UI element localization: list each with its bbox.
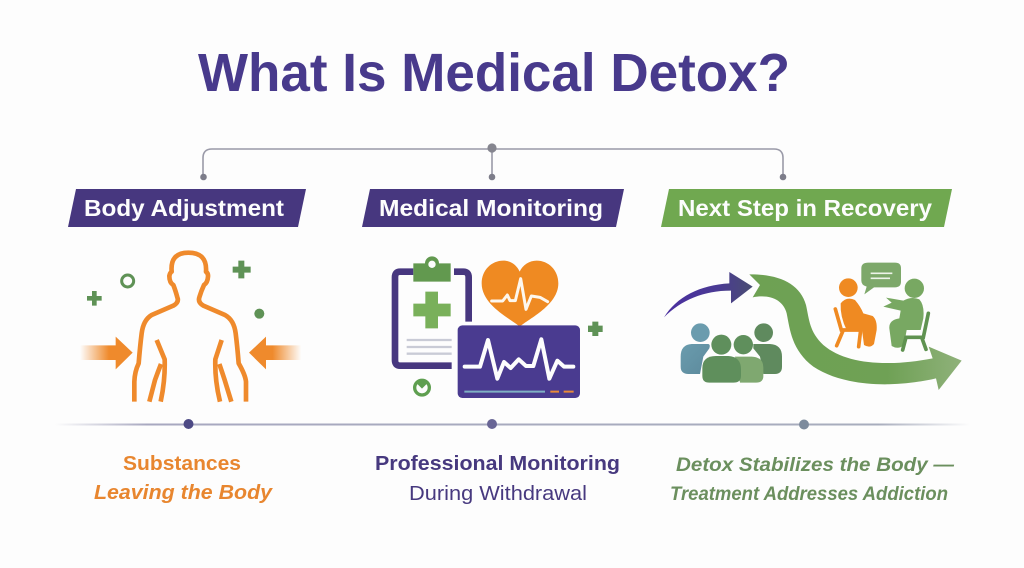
- caption: professional monitoring: During Withdrawal: [409, 483, 587, 505]
- caption: substances: Leaving the Body: [94, 482, 273, 504]
- caption: professional monitoring: Professional Monitoring: [375, 453, 620, 475]
- heading: next step in recovery: [661, 189, 952, 227]
- monitor: [458, 325, 580, 398]
- body outline: [134, 253, 246, 402]
- icon: recovery path with group and counseling: [664, 263, 962, 390]
- group of people: [681, 323, 782, 383]
- caption: professional monitoring: [375, 453, 620, 505]
- left arrow: [80, 337, 133, 369]
- heart: [482, 261, 558, 327]
- heading: next step in recovery: Next Step in Recovery: [678, 195, 932, 221]
- timeline axis: [55, 419, 970, 430]
- icon: clipboard, heart and monitor: [395, 256, 603, 398]
- heading: body adjustment: Body Adjustment: [84, 195, 284, 221]
- caption: substances: Substances: [123, 453, 241, 475]
- icon: body with arrows: [80, 253, 301, 402]
- caption: substances: [94, 453, 273, 504]
- purple arrow: [664, 272, 753, 317]
- decorative symbols: [87, 261, 264, 319]
- speech bubble: [861, 263, 901, 294]
- caption: detox stabilizes: Detox Stabilizes the Body —: [676, 455, 955, 476]
- clipboard: [395, 256, 469, 366]
- heading: body adjustment: [68, 189, 306, 227]
- small check circle: [415, 380, 429, 395]
- heading: medical monitoring: [362, 189, 624, 227]
- caption: detox stabilizes: Treatment Addresses Addiction: [670, 484, 948, 505]
- caption: detox stabilizes: [670, 455, 955, 505]
- green path arrow: [749, 274, 962, 390]
- connector tree: [200, 143, 786, 180]
- title: What Is Medical Detox?: [198, 43, 790, 103]
- counselling: seated figures: [835, 263, 928, 350]
- right arrow: [249, 337, 301, 369]
- heading: medical monitoring: Medical Monitoring: [379, 195, 603, 221]
- small plus: [588, 322, 603, 336]
